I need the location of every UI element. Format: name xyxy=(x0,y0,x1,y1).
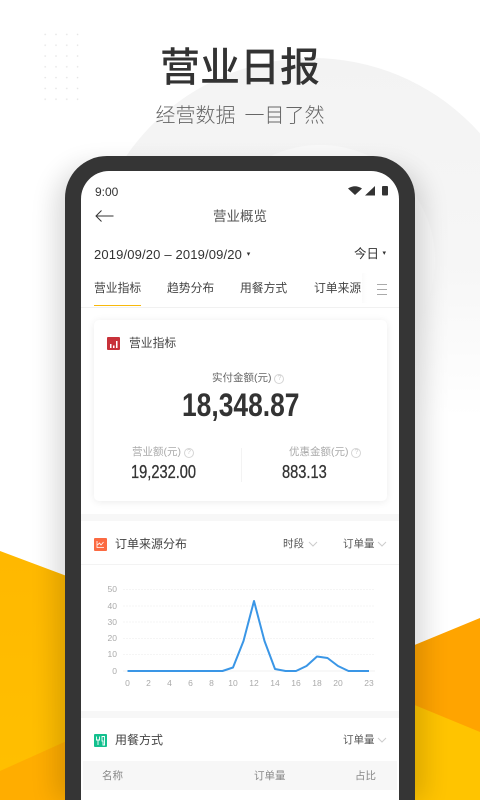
icon: red bars xyxy=(107,337,120,350)
icon: orange chart xyxy=(94,538,107,551)
status time: 9:00 xyxy=(95,185,118,199)
period filter: 时段 xyxy=(283,538,304,550)
screen title: 营业概览 xyxy=(213,209,267,224)
x axis labels: 6 xyxy=(188,678,193,688)
divider xyxy=(241,448,242,482)
y axis labels: 0 xyxy=(112,666,117,676)
tab fade xyxy=(362,273,367,303)
panel heading: 营业指标 xyxy=(129,336,176,350)
y axis labels: 20 xyxy=(108,633,117,643)
column: share: 占比 xyxy=(355,770,376,782)
subtitle: 经营数据 一目了然 xyxy=(156,105,324,127)
x axis labels: 20 xyxy=(333,678,343,688)
tab underline xyxy=(94,304,141,306)
column: name: 名称 xyxy=(102,770,123,782)
icon: status indicators xyxy=(348,186,388,196)
x axis labels: 12 xyxy=(249,678,259,688)
tab: metrics: 营业指标 xyxy=(94,281,141,295)
tab: dining: 用餐方式 xyxy=(240,281,287,295)
x axis labels: 23 xyxy=(364,678,374,688)
panel: business metrics xyxy=(94,320,387,501)
value: paid amount: 18,348.87 xyxy=(182,387,299,423)
x axis labels: 10 xyxy=(228,678,238,688)
y axis labels: 10 xyxy=(108,649,117,659)
label: revenue: 营业额(元) xyxy=(132,446,181,458)
x axis labels: 16 xyxy=(291,678,301,688)
today selector: 今日 ▾ xyxy=(354,247,386,261)
y axis labels: 50 xyxy=(108,584,117,594)
table header xyxy=(83,761,397,790)
x axis labels: 18 xyxy=(312,678,322,688)
x axis labels xyxy=(125,678,374,688)
panel: order source xyxy=(81,537,399,565)
section heading: 订单来源分布 xyxy=(115,537,187,551)
icon: back arrow xyxy=(95,210,114,222)
date range: 2019/09/20 – 2019/09/20 ▾ xyxy=(94,247,250,262)
tab: trend: 趋势分布 xyxy=(167,281,214,295)
x axis labels: 8 xyxy=(209,678,214,688)
section gap xyxy=(81,514,399,521)
label: discount: 优惠金额(元) xyxy=(289,446,348,458)
icon: green cutlery xyxy=(94,734,107,747)
order filter: 订单量 xyxy=(343,734,374,746)
x axis labels: 2 xyxy=(146,678,151,688)
column: orders: 订单量 xyxy=(254,770,286,782)
y axis labels xyxy=(108,584,117,676)
label: discount: ? xyxy=(354,449,358,456)
tab: source: 订单来源 xyxy=(314,281,361,295)
icon: chevron xyxy=(308,542,318,546)
icon: chevron xyxy=(378,542,386,546)
value: revenue: 19,232.00 xyxy=(131,461,196,482)
x axis labels: 0 xyxy=(125,678,130,688)
line chart xyxy=(108,584,375,688)
icon: tab menu xyxy=(377,284,387,295)
data line xyxy=(128,601,369,671)
y axis labels: 40 xyxy=(108,601,117,611)
section gap xyxy=(81,711,399,718)
y axis labels: 30 xyxy=(108,617,117,627)
icon: chevron xyxy=(378,738,386,742)
title: 营业日报 xyxy=(160,46,320,90)
x axis labels: 14 xyxy=(270,678,280,688)
order filter: 订单量 xyxy=(343,538,374,550)
x axis labels: 4 xyxy=(167,678,172,688)
phone screen xyxy=(81,171,399,800)
tabs xyxy=(94,281,387,306)
label: paid amount: 实付金额(元) xyxy=(212,372,272,384)
section heading: 用餐方式 xyxy=(115,733,163,747)
phone frame xyxy=(65,156,415,800)
panel: dining method xyxy=(94,733,386,782)
label: paid amount: ? xyxy=(277,375,281,382)
value: discount: 883.13 xyxy=(282,461,327,482)
label: revenue: ? xyxy=(187,449,191,456)
